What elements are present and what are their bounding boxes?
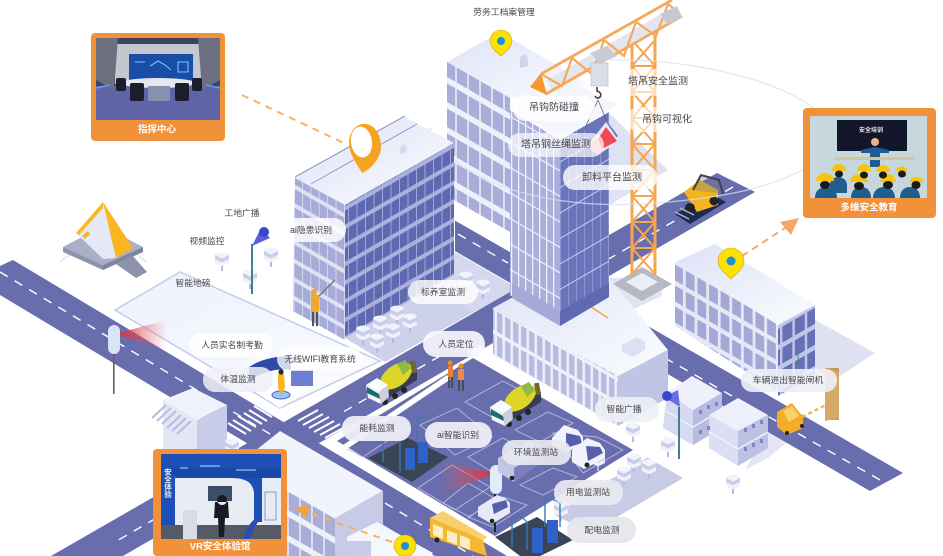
tower crane: [530, 0, 682, 301]
label: anti-collision: 吊钩防碰撞: [529, 100, 579, 114]
gate barrier and yellow truck: [777, 354, 839, 435]
label: video surveillance: 视频监控: [189, 235, 225, 246]
crane hook: [584, 63, 612, 134]
pole with infrared scanner, right: [440, 462, 502, 532]
road network: [0, 173, 903, 556]
broadcast pole, right: [662, 390, 680, 459]
label: labour archive: 劳务工档案管理: [473, 6, 535, 17]
label: site broadcast: [208, 201, 276, 225]
label: labour archive: [461, 2, 541, 22]
small houses: [663, 376, 768, 466]
building: roadside shop: [152, 388, 227, 452]
yellow location pin, right: [718, 248, 744, 279]
wifi education booth: [249, 356, 313, 408]
card: safety education: [803, 108, 936, 218]
label: wire rope: [508, 133, 604, 157]
label: unloading platform: 卸料平台监测: [582, 170, 642, 184]
building: bottom left block: [240, 431, 383, 556]
label: smart weighbridge: 智能地磅: [175, 277, 211, 288]
label: site broadcast: 工地广播: [224, 207, 260, 218]
label: ai hazard: [276, 218, 346, 242]
photo: classroom: 安全培训: [859, 126, 883, 134]
road: upper-left to bottom-right: [0, 260, 507, 556]
label: unloading platform: [563, 165, 657, 190]
label: crane safety: [612, 69, 704, 96]
label: environment: 环境监测站: [514, 446, 558, 457]
label: energy: 能耗监测: [359, 422, 395, 433]
parking bay lines: [343, 381, 623, 527]
orange location pin: [349, 124, 381, 173]
crane base: [613, 267, 672, 301]
card: VR experience: VR安全体验馆: [190, 540, 251, 552]
building: command centre block: [293, 116, 454, 340]
yellow location pin, bottom: [394, 535, 416, 556]
building: podium: [493, 255, 668, 426]
label: video surveillance: [176, 229, 241, 253]
dashed arrow: VR card: [295, 505, 392, 542]
forklift: [675, 175, 726, 224]
label: energy: [342, 416, 411, 441]
card: VR experience: [153, 449, 287, 556]
label: environment: [502, 440, 571, 465]
cement mixer truck, parking: [490, 379, 541, 427]
landscaping trees: [215, 248, 740, 521]
pyramid monument: [60, 202, 147, 278]
label: body temperature: 体温监测: [220, 373, 256, 384]
pole with infrared scanner, left: [108, 320, 167, 394]
label: ai hazard: ai隐患识别: [290, 224, 332, 235]
crosswalks: [228, 406, 345, 438]
crane mast: [632, 25, 655, 276]
energy monitoring station: [368, 416, 448, 482]
worker with inspection pole: [311, 280, 335, 326]
yellow bus: [430, 511, 487, 556]
label: personnel location: 人员定位: [438, 338, 474, 349]
building: front tall tower: [510, 78, 618, 326]
label: hook visual: [627, 107, 705, 132]
dashed arrow: education card: [742, 218, 799, 256]
photo: command room: [96, 38, 220, 120]
label: attendance: [189, 333, 273, 357]
white strips around the parking lot: [325, 345, 660, 545]
ground: shaded lots and building shadows: [345, 112, 875, 533]
label: crane safety: 塔吊安全监测: [628, 74, 688, 88]
label: power usage: [554, 480, 623, 505]
label: wifi education: [277, 347, 362, 371]
photo: VR hall: 安全体验: [163, 467, 172, 499]
label: ai recognition: ai智能识别: [437, 429, 479, 440]
crane jib: [541, 0, 682, 94]
road: rear road to gate: [455, 215, 903, 491]
suspended load: [586, 116, 619, 155]
card: command centre: 指挥中心: [138, 124, 176, 136]
label: vehicle gate: 车辆进出智能闸机: [753, 374, 823, 385]
power distribution station: [495, 499, 573, 556]
label: anti-collision: [513, 96, 595, 121]
label: wifi education: 无线WIFI教育系统: [284, 353, 356, 364]
building: right office: [675, 244, 815, 396]
card: command centre: [91, 33, 225, 141]
label: personnel location: [423, 331, 485, 357]
two workers: [448, 360, 464, 391]
label: ai recognition: [425, 422, 492, 448]
cement mixer truck, road: [366, 357, 417, 405]
road centre dashes: [0, 187, 896, 556]
parked vans: [478, 425, 605, 524]
label: vehicle gate: [741, 369, 837, 392]
label: curing room: [408, 280, 478, 304]
white dividing strip: [340, 375, 451, 451]
label: wire rope: 塔吊钢丝绳监测: [521, 138, 591, 150]
parking lot: [337, 358, 633, 536]
faint connection arcs: [455, 60, 818, 205]
broadcast pole, left: [251, 227, 270, 294]
yellow location pin, top: [490, 30, 512, 56]
label: curing room: 标养室监测: [421, 286, 465, 297]
building: bottom small block: [347, 522, 433, 556]
label: hook visual: 吊钩可视化: [642, 112, 692, 126]
dashed arrow: command centre to building: [242, 95, 346, 144]
label: power usage: 用电监测站: [566, 486, 610, 497]
label: smart broadcast: 智能广播: [606, 403, 642, 414]
card: safety education: 多维安全教育: [840, 202, 898, 214]
road: lower-left to upper-right: [51, 173, 755, 556]
building: rear office tower: [447, 32, 590, 252]
label: smart broadcast: [595, 397, 659, 422]
plaza: smart weighbridge area: [115, 272, 380, 408]
label: distribution: 配电监测: [584, 524, 620, 535]
label: distribution: [567, 517, 636, 543]
label: attendance: 人员实名制考勤: [201, 339, 263, 350]
label: body temperature: [203, 367, 273, 392]
